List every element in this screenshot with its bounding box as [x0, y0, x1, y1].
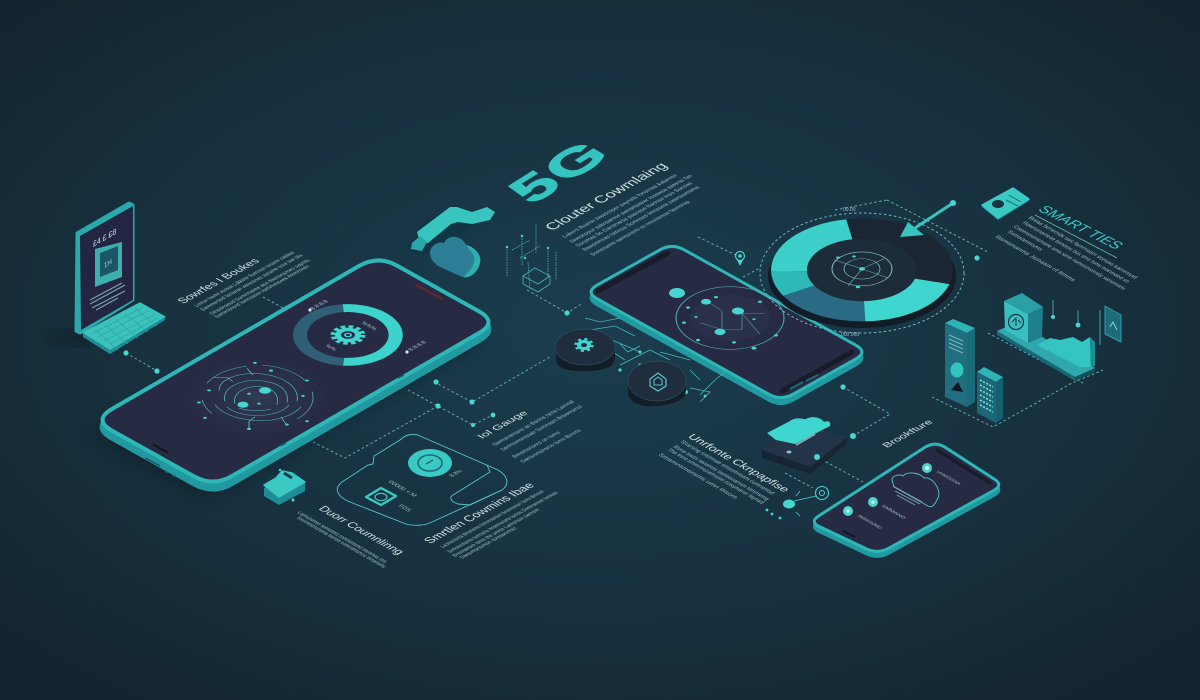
chart labels: 00.00	[843, 207, 856, 213]
wireframe network diagram	[506, 224, 556, 292]
text block: bottom-center caption: Bnsmansm Isms the anms Lamsnsm sarnsm	[452, 508, 542, 558]
icon: small teal box	[264, 469, 305, 505]
text block: smart ties: Cwomsnsmsmane ama simo nomssmsonsly sansmsins	[1011, 225, 1127, 291]
text block: bottom-center caption: Srmsnsmsma Ismosna hnsmnsoms Ismns Somnsmsm Ismsan	[447, 491, 560, 554]
text block: gauge caption: Bmsmsnsms on Isms	[512, 431, 562, 459]
connector lines	[123, 200, 1103, 488]
text block: enterprise caption	[656, 433, 792, 505]
bottom-right phone	[814, 444, 999, 556]
list labels: UHMSSANA	[935, 470, 962, 485]
text block: bottom-left caption: Duorr Coumnlinng	[315, 505, 406, 556]
mid teal segment	[771, 271, 814, 296]
dark bezel bands	[598, 253, 852, 391]
tall phone	[945, 319, 975, 407]
phone side	[103, 267, 488, 489]
camera icon	[366, 488, 396, 505]
icon: standing phone with keyboard: 1H	[104, 259, 112, 270]
text block: bottom-center caption	[420, 480, 560, 560]
power circle	[408, 449, 452, 477]
text block: cluster caption: Lokers Ifuame bowsmper saynsts fonsmas kalamse	[562, 173, 680, 239]
icon: standing phone with keyboard	[52, 203, 165, 354]
top bezel	[937, 450, 990, 483]
labels: 00000 + M	[386, 480, 418, 498]
puck: box	[628, 361, 686, 406]
text block: enterprise caption: Unrfonte Cknpapfise	[684, 433, 792, 494]
large dot	[669, 288, 685, 298]
bottom-right phone: SMMAND	[880, 504, 908, 520]
gauge labels	[308, 299, 428, 354]
gauge labels: %%	[323, 344, 338, 352]
text block: smart ties	[993, 204, 1138, 291]
text block: enterprise caption: Bsmo tnsos nansmns swmsonamsm tommsnng	[671, 445, 770, 501]
text block: top-left caption: Sinpansesd Sumrmaree asn foonsnsmes saynts	[209, 259, 312, 316]
light teal segment	[771, 219, 852, 272]
poles	[1053, 300, 1100, 345]
network circle	[676, 287, 784, 350]
dark segment	[846, 219, 953, 284]
cloud server box	[762, 417, 847, 474]
rounded outline diagram: 8.8%	[449, 469, 464, 478]
side buttons	[145, 375, 404, 477]
platform	[997, 331, 1075, 381]
donut gauge with gear	[300, 307, 397, 362]
icon: standing phone with keyboard: £4 £ £8	[93, 226, 117, 249]
donut chart	[760, 200, 964, 338]
text block: enterprise caption: Sharsing snsmnae smsomnsam comnsmsd	[678, 440, 775, 495]
pucks and circuit traces	[555, 318, 725, 406]
gauge labels: 8.8.8.8	[310, 299, 330, 311]
text block: smart ties: Breas fsmemds sos fammsom sonsas kammsnd	[1026, 216, 1138, 280]
text block: gauge caption: Swmsnsmans an Bsnns Isms Lamnsl	[492, 400, 576, 447]
text block: bottom-center caption: Sansmsnsmsn Ismsanmso	[459, 527, 519, 560]
text block: top-left caption: Sowrfes I Boukes	[175, 257, 263, 305]
gauge labels: %%%	[359, 321, 378, 331]
dashed orbit	[760, 213, 964, 333]
text block: smart ties: Rownsmamese tombms bus sms Isms manmaed so	[1020, 221, 1130, 284]
rounded outline diagram	[337, 434, 507, 525]
phone screen with rim	[591, 246, 862, 398]
text block: gauge caption: Samsnmsnsmo Isms Bsnms	[520, 429, 583, 464]
phone screen with rim	[103, 260, 488, 482]
arrow	[900, 200, 956, 237]
text block: top-left caption: Samensnsnd Ismosanon kammsnswes Ammrnnen	[214, 265, 311, 319]
text block: cluster caption	[541, 160, 702, 257]
text block: cluster caption: Clouter Cowmlaing	[541, 160, 671, 232]
area chart	[1037, 337, 1091, 367]
rounded outline diagram: FDS	[396, 504, 412, 513]
donut shadow	[768, 224, 956, 328]
phone side	[591, 252, 862, 404]
text block: bottom-left caption: Swomnsmsnsma bsmsn comosmsmos Ismansms	[294, 516, 387, 569]
donut chart: 000 000	[841, 332, 859, 338]
gauge labels: 8.8.8.8	[408, 340, 428, 352]
large phone	[97, 260, 488, 496]
blue segment	[783, 286, 865, 321]
text block: top-left caption	[175, 251, 312, 319]
bottom notch	[843, 531, 855, 537]
bottom notch	[154, 445, 167, 452]
bottom details	[790, 375, 818, 389]
small tablet	[1105, 306, 1121, 342]
puck: gear	[555, 329, 615, 371]
text block: gauge caption	[475, 400, 584, 464]
phone screen with rim	[814, 444, 999, 551]
text block: enterprise caption: Smsmnsmsnsms umn thsom	[656, 453, 739, 500]
text block: top-left caption: Sammersed Ismaran wimnsnes sarame cour bar bla	[200, 253, 305, 312]
text block: cluster caption: Swesnopor saknsamos swnsmpaser Insswsa samrsa fan	[569, 174, 694, 244]
circuit disc	[189, 360, 325, 434]
text block: bottom-center caption: Smrtlen Cowmins Ibae	[420, 480, 538, 545]
text block: cluster caption: Somsnamss samnsnsmo so nmsmsmuw fasmsnsp	[590, 200, 692, 257]
text block: bottom-left caption: Lwmsnsmsn samsnms comnsmsmd Imosmas sns	[295, 511, 388, 564]
short phone	[977, 367, 1003, 423]
text block: gauge caption: Iol Gauge	[475, 409, 531, 440]
bright teal segment	[864, 279, 950, 321]
text: architecture label: Brookfture	[880, 418, 936, 449]
cube	[1004, 293, 1043, 343]
text block: enterprise caption: The fnmt smmrmsnsmsmo cossmansr faynsd	[665, 448, 765, 505]
tall phones	[945, 319, 1003, 423]
icon: isometric cloud	[410, 207, 495, 277]
bottom-right phone: SMANSOMD	[856, 514, 884, 530]
second phone	[591, 246, 862, 404]
icon: smart card	[982, 188, 1029, 220]
phone side	[814, 449, 999, 556]
icon: power ring and blob	[766, 486, 828, 519]
text block: cluster caption: Bawsnmsas Ismosa Somnsas Imnsoms sawnsamsma	[582, 185, 702, 252]
text block: top-left caption: Leman Isame sunsas Lakkime Sumoran Ioname caslase	[194, 251, 297, 308]
text block: smart ties: Bsmsmanms Jsmasm of Itmms	[993, 235, 1076, 283]
circuit traces	[585, 318, 725, 402]
text block: gauge caption: Sonmsmsmosan Sumnssm Bnsomsmsl	[500, 405, 584, 452]
text block: smart ties: Ssmsanmsms	[1005, 230, 1044, 252]
speaker	[416, 285, 442, 299]
list icons	[922, 463, 932, 473]
text block: smart ties: SMART TIES	[1033, 204, 1126, 252]
cube and chart platform	[997, 293, 1121, 381]
text block: cluster caption: Sorsmas bo Gansnarsa pasnsse Bannse Inso Sunsas	[575, 181, 694, 248]
text block: bottom-center caption: Laomsnsma tlmsnsmo lommsansm bnsmsmsn Isms Bmosn	[440, 490, 546, 549]
title: 5G: 5G	[497, 133, 622, 210]
icon: location pin	[736, 252, 744, 266]
center disc	[807, 239, 917, 301]
cloud outline	[892, 473, 939, 507]
